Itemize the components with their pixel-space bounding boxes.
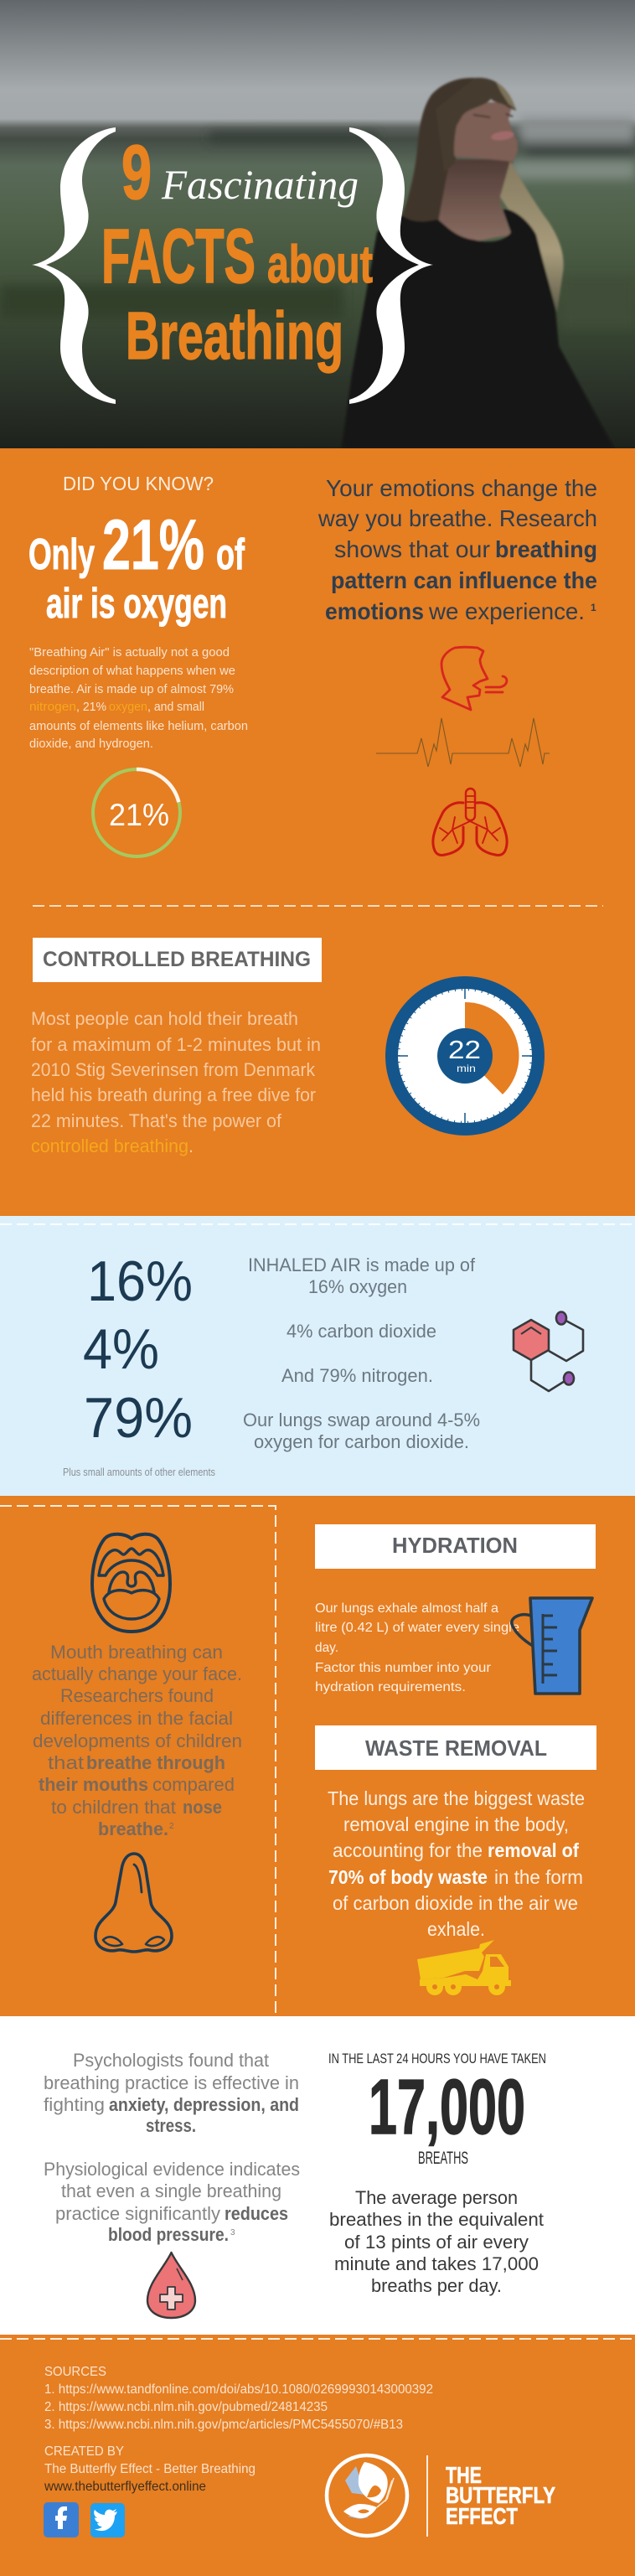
icon: twitter [90, 2503, 125, 2537]
headline: only 21% of air is oxygen [28, 505, 245, 627]
text block: average person: The average person [355, 2187, 518, 2208]
text block: lungs as waste engine: The lungs are the biggest waste [328, 1787, 585, 1809]
icon: molecule [514, 1312, 583, 1391]
text block: physiological evidence: Physiological evidence indicates [44, 2159, 300, 2180]
text block: emotions and breathing: we experience. [428, 598, 585, 624]
text block: breathing air description: , 21% [76, 700, 106, 714]
text block: mouth breathing changes your face: breathe. [98, 1818, 168, 1839]
headline: only 21% of air is oxygen: air is oxygen [46, 580, 227, 627]
icon: nose [96, 1854, 172, 1952]
text block: breath hold record [31, 1008, 321, 1156]
text block: lungs as waste engine: removal of [488, 1839, 579, 1861]
text block: physiological evidence: 3 [230, 2228, 235, 2237]
text block: water loss: Factor this number into your [315, 1661, 492, 1675]
text block: inhaled air composition: 16% oxygen [308, 1276, 407, 1297]
heading box: hydration: HYDRATION [392, 1533, 518, 1558]
text block: mouth breathing changes your face: to children that [51, 1797, 176, 1818]
text block: inhaled air composition: 4% carbon dioxide [287, 1321, 436, 1342]
text block: physiological evidence: practice significantly [55, 2203, 220, 2224]
chart: 22 minute stopwatch: 22 [448, 1035, 481, 1064]
text block: breathing air description: breathe. Air is made up of almost 79% [29, 682, 234, 696]
text block: emotions and breathing [318, 475, 597, 624]
text block: mouth breathing changes your face: actually change your face. [32, 1663, 242, 1684]
heading: did you know: DID YOU KNOW? [63, 473, 214, 494]
text block: lungs as waste engine: in the form [494, 1866, 583, 1888]
hero photo: woman breathing in a field [0, 0, 635, 448]
text block: emotions and breathing: way you breathe. Research [318, 505, 597, 531]
text block: psychologists [44, 2050, 299, 2136]
icon: heartbeat line [376, 718, 550, 767]
panel: did you know [28, 473, 248, 856]
text block: created by: www.thebutterflyeffect.online [44, 2480, 206, 2494]
icon: blood drop [147, 2253, 195, 2318]
text block: physiological evidence [44, 2159, 300, 2245]
headline: only 21% of air is oxygen: Only [28, 530, 95, 579]
text block: average person: minute and takes 17,000 [334, 2253, 539, 2274]
text block: average person: of 13 pints of air every [344, 2232, 529, 2253]
logo: the butterfly effect [327, 2455, 555, 2537]
hero banner [0, 0, 635, 448]
big percentages: 79% [84, 1386, 193, 1450]
icon: measuring jug [512, 1598, 592, 1694]
logo wordmark: BUTTERFLY [446, 2482, 555, 2508]
text block: breathing air description: "Breathing Air" is actually not a good [29, 645, 230, 660]
text block: breathing air description: oxygen [109, 700, 147, 714]
text block: breath hold record: held his breath during a free dive for [31, 1084, 316, 1105]
logo mark: butterfly in circle [327, 2455, 407, 2536]
text block: average person: breathes in the equivalent [329, 2209, 544, 2230]
orange section background [0, 448, 635, 1216]
text block: inhaled air composition: And 79% nitrogen. [281, 1365, 433, 1386]
text block: created by: CREATED BY [44, 2444, 124, 2459]
title: Fascinating [161, 161, 359, 208]
text block: breath hold record: 2010 Stig Severinsen from Denmark [31, 1059, 316, 1080]
text block: breathing air description: description of what happens when we [29, 664, 235, 678]
heading box: controlled breathing: CONTROLLED BREATHING [43, 948, 311, 971]
text block: mouth breathing changes your face [32, 1642, 242, 1839]
title: about [267, 235, 373, 294]
text block: sources [44, 2365, 433, 2432]
text block: mouth breathing changes your face: that [48, 1752, 84, 1773]
icon: lungs [433, 789, 507, 855]
text block: breathing air description: amounts of elements like helium, carbon [29, 719, 248, 733]
text block: breathing air description: , and small [147, 700, 204, 714]
text block: water loss: hydration requirements. [315, 1680, 466, 1694]
text block: average person [329, 2187, 544, 2296]
headline: only 21% of air is oxygen: of [216, 530, 245, 579]
text block: water loss: litre (0.42 L) of water every single [315, 1621, 519, 1635]
panel: footer [0, 2335, 635, 2576]
text block: emotions and breathing: shows that our [334, 536, 490, 562]
stat: 17,000 breaths: BREATHS [418, 2149, 468, 2168]
text block: breathing air description: dioxide, and hydrogen. [29, 737, 153, 751]
text block: mouth breathing changes your face: their mouths [39, 1774, 148, 1795]
text block: lungs as waste engine: of carbon dioxide in the air we [333, 1892, 578, 1914]
chart: 21% ring [93, 769, 180, 856]
text block: created by [44, 2444, 256, 2494]
title: FACTS [101, 214, 256, 299]
panel: mouth breathing [32, 1534, 242, 1952]
panel: hydration [315, 1524, 596, 1694]
panel: psychology and breath count [0, 2016, 635, 2335]
logo wordmark: EFFECT [446, 2503, 518, 2529]
orange lower section background [0, 1496, 635, 2016]
text block: emotions and breathing: Your emotions change the [326, 475, 597, 501]
text block: psychologists: stress. [146, 2115, 196, 2136]
text block: breathing air description [29, 645, 248, 751]
text block: average person: breaths per day. [371, 2275, 502, 2296]
right curly brace [349, 127, 433, 404]
text block: breath hold record: for a maximum of 1-2 minutes but in [31, 1034, 321, 1055]
text block: psychologists: Psychologists found that [73, 2050, 269, 2071]
icon: dump truck [417, 1940, 511, 1995]
title: 9 [121, 130, 152, 215]
text block: water loss: day. [315, 1641, 338, 1655]
panel: waste removal [315, 1725, 596, 1995]
text block: emotions and breathing: pattern can influence the [331, 567, 597, 593]
logo wordmark: THE [446, 2462, 482, 2488]
text block: sources: 2. https://www.ncbi.nlm.nih.gov/pubmed/24814235 [44, 2400, 328, 2414]
footnote: other elements: Plus small amounts of other elements [63, 1466, 215, 1478]
panel: controlled breathing [31, 938, 545, 1156]
text block: mouth breathing changes your face: breathe through [86, 1752, 225, 1773]
panel: emotions [318, 475, 597, 855]
heading box: waste removal: WASTE REMOVAL [365, 1735, 547, 1761]
text block: lungs as waste engine: removal engine in the body, [343, 1813, 569, 1835]
text block: mouth breathing changes your face: developments of children [33, 1730, 242, 1751]
text block: psychologists: anxiety, depression, and [109, 2094, 299, 2115]
text block: breathing air description: nitrogen [29, 700, 76, 714]
stat: 17,000 breaths: 17,000 [369, 2063, 525, 2150]
dashed column divider [0, 1506, 276, 2016]
big percentages: 16% [87, 1249, 193, 1313]
big percentages: 4% [83, 1317, 159, 1381]
text block: created by: The Butterfly Effect - Better Breathing [44, 2462, 256, 2476]
big percentages [83, 1249, 193, 1450]
dashed divider [33, 905, 603, 907]
text block: water loss [315, 1601, 519, 1694]
text block: psychologists: breathing practice is effective in [44, 2072, 299, 2093]
text block: inhaled air composition: Our lungs swap around 4-5% [243, 1410, 480, 1430]
text block: mouth breathing changes your face: 2 [169, 1822, 174, 1831]
text block: mouth breathing changes your face: Researchers found [60, 1685, 214, 1706]
stat: 17,000 breaths [328, 2051, 546, 2168]
text block: psychologists: fighting [44, 2094, 105, 2115]
icon: head exhaling [441, 647, 507, 710]
heading box: hydration [315, 1524, 596, 1569]
text block: sources: 3. https://www.ncbi.nlm.nih.gov/pmc/articles/PMC5455070/#B13 [44, 2418, 403, 2432]
text block: lungs as waste engine: exhale. [427, 1918, 485, 1940]
chart: 22 minute stopwatch: min [457, 1063, 476, 1074]
headline: only 21% of air is oxygen: 21% [102, 505, 204, 584]
text block: physiological evidence: reduces [225, 2203, 288, 2224]
text block: mouth breathing changes your face: Mouth breathing can [50, 1642, 223, 1663]
text block: breath hold record: 22 minutes. That's the power of [31, 1110, 282, 1131]
text block: breath hold record: controlled breathing [31, 1135, 188, 1156]
chart: 22 minute stopwatch [385, 976, 545, 1135]
text block: inhaled air composition [243, 1254, 480, 1452]
text block: sources: 1. https://www.tandfonline.com/doi/abs/10.1080/02699930143000392 [44, 2382, 433, 2397]
logo wordmark [446, 2462, 555, 2529]
text block: emotions and breathing: breathing [495, 536, 597, 562]
text block: mouth breathing changes your face: compared [152, 1774, 235, 1795]
left curly brace [32, 127, 116, 404]
title: Breathing [126, 298, 343, 373]
text block: breath hold record: Most people can hold their breath [31, 1008, 298, 1029]
text block: mouth breathing changes your face: nose [183, 1797, 222, 1818]
text block: breath hold record: . [188, 1135, 194, 1156]
panel: inhaled air [0, 1216, 635, 1496]
heading box: waste removal [315, 1725, 596, 1770]
text block: physiological evidence: that even a single breathing [61, 2180, 281, 2201]
icon: facebook [44, 2502, 79, 2537]
text block: emotions and breathing: emotions [325, 598, 424, 624]
text block: inhaled air composition: INHALED AIR is made up of [248, 1254, 476, 1275]
text block: sources: SOURCES [44, 2365, 106, 2379]
text block: mouth breathing changes your face: differences in the facial [40, 1708, 233, 1729]
title [101, 130, 373, 373]
icon: open mouth [92, 1534, 170, 1632]
text block: lungs as waste engine: 70% of body waste [328, 1866, 488, 1888]
stat: 17,000 breaths: IN THE LAST 24 HOURS YOU HAVE TAKEN [328, 2051, 546, 2066]
heading box: controlled breathing [33, 938, 322, 982]
text block: lungs as waste engine: accounting for the [333, 1839, 483, 1861]
text block: lungs as waste engine [328, 1787, 585, 1940]
chart: 21% ring: 21% [109, 798, 169, 832]
text block: physiological evidence: blood pressure. [108, 2224, 229, 2245]
text block: inhaled air composition: oxygen for carbon dioxide. [254, 1431, 469, 1452]
text block: emotions and breathing: 1 [591, 602, 596, 613]
text block: water loss: Our lungs exhale almost half a [315, 1601, 498, 1616]
